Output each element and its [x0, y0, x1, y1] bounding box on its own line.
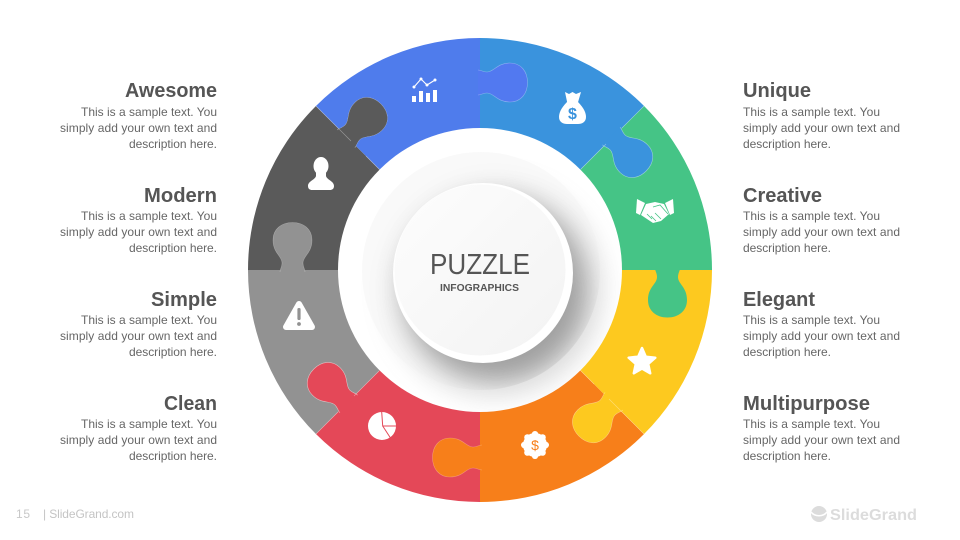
piece: red: [300, 355, 480, 502]
text block: Elegant: simply add your own text and: [743, 329, 900, 343]
text block: Multipurpose: Multipurpose: [743, 393, 870, 415]
text block: Modern: [60, 185, 217, 255]
piece: green: [579, 106, 712, 318]
text block: Multipurpose: [743, 393, 900, 463]
text block: Unique: Unique: [743, 80, 811, 102]
text block: Multipurpose: simply add your own text and: [743, 433, 900, 447]
icon: money bag: $: [568, 106, 577, 123]
text block: Awesome: This is a sample text. You: [81, 105, 217, 119]
text block: Modern: description here.: [129, 241, 217, 255]
text block: Awesome: [60, 80, 217, 151]
text block: Modern: Modern: [144, 185, 217, 207]
footer: site name: | SlideGrand.com: [43, 507, 134, 521]
piece: yellow: [565, 270, 712, 450]
icon: warning triangle: [286, 304, 312, 327]
text block: Creative: simply add your own text and: [743, 225, 900, 239]
text block: Awesome: description here.: [129, 137, 217, 151]
icon: person: [308, 157, 334, 190]
text block: Creative: This is a sample text. You: [743, 209, 880, 223]
text block: Simple: description here.: [129, 345, 217, 359]
text block: Simple: simply add your own text and: [60, 329, 217, 343]
piece: sky blue: [480, 38, 660, 185]
text block: Simple: [60, 289, 217, 359]
icon: handshake: [636, 199, 674, 223]
text block: Elegant: This is a sample text. You: [743, 313, 880, 327]
center title: PUZZLE: [430, 249, 530, 281]
piece: orange: [432, 369, 644, 502]
footer: logo: SlideGrand: [830, 507, 917, 524]
puzzle ring: [248, 38, 712, 502]
icon: line and bar chart: [412, 78, 437, 102]
text block: Unique: [743, 80, 900, 151]
text block: Elegant: description here.: [743, 345, 831, 359]
text block: Modern: This is a sample text. You: [81, 209, 217, 223]
text block: Multipurpose: This is a sample text. You: [743, 417, 880, 431]
text block: Clean: This is a sample text. You: [81, 417, 217, 431]
text block: Multipurpose: description here.: [743, 449, 831, 463]
text block: Unique: simply add your own text and: [743, 121, 900, 135]
text block: Unique: This is a sample text. You: [743, 105, 880, 119]
piece: gray: [248, 222, 381, 434]
center medallion: [338, 128, 622, 412]
text block: Clean: simply add your own text and: [60, 433, 217, 447]
text block: Simple: Simple: [151, 289, 217, 311]
text block: Creative: description here.: [743, 241, 831, 255]
icon: gear with dollar: $: [531, 437, 539, 453]
text block: Clean: [60, 393, 217, 463]
icon: star: [629, 348, 655, 373]
text block: Elegant: [743, 289, 900, 359]
text block: Creative: [743, 185, 900, 255]
text block: Modern: simply add your own text and: [60, 225, 217, 239]
text block: Elegant: Elegant: [743, 289, 815, 311]
icon: gear with dollar: [521, 431, 549, 459]
piece: indigo blue: [316, 38, 528, 171]
icon: pie chart: [368, 412, 396, 440]
text block: Creative: Creative: [743, 185, 822, 207]
center subtitle: INFOGRAPHICS: [440, 283, 519, 294]
text block: Awesome: Awesome: [125, 80, 217, 102]
text block: Awesome: simply add your own text and: [60, 121, 217, 135]
piece: dark gray: [248, 90, 395, 270]
text block: Simple: This is a sample text. You: [81, 313, 217, 327]
text block: Clean: Clean: [164, 393, 217, 415]
icon: money bag: [559, 92, 586, 124]
text block: Clean: description here.: [129, 449, 217, 463]
footer: page number: 15: [16, 507, 30, 521]
text block: Unique: description here.: [743, 137, 831, 151]
